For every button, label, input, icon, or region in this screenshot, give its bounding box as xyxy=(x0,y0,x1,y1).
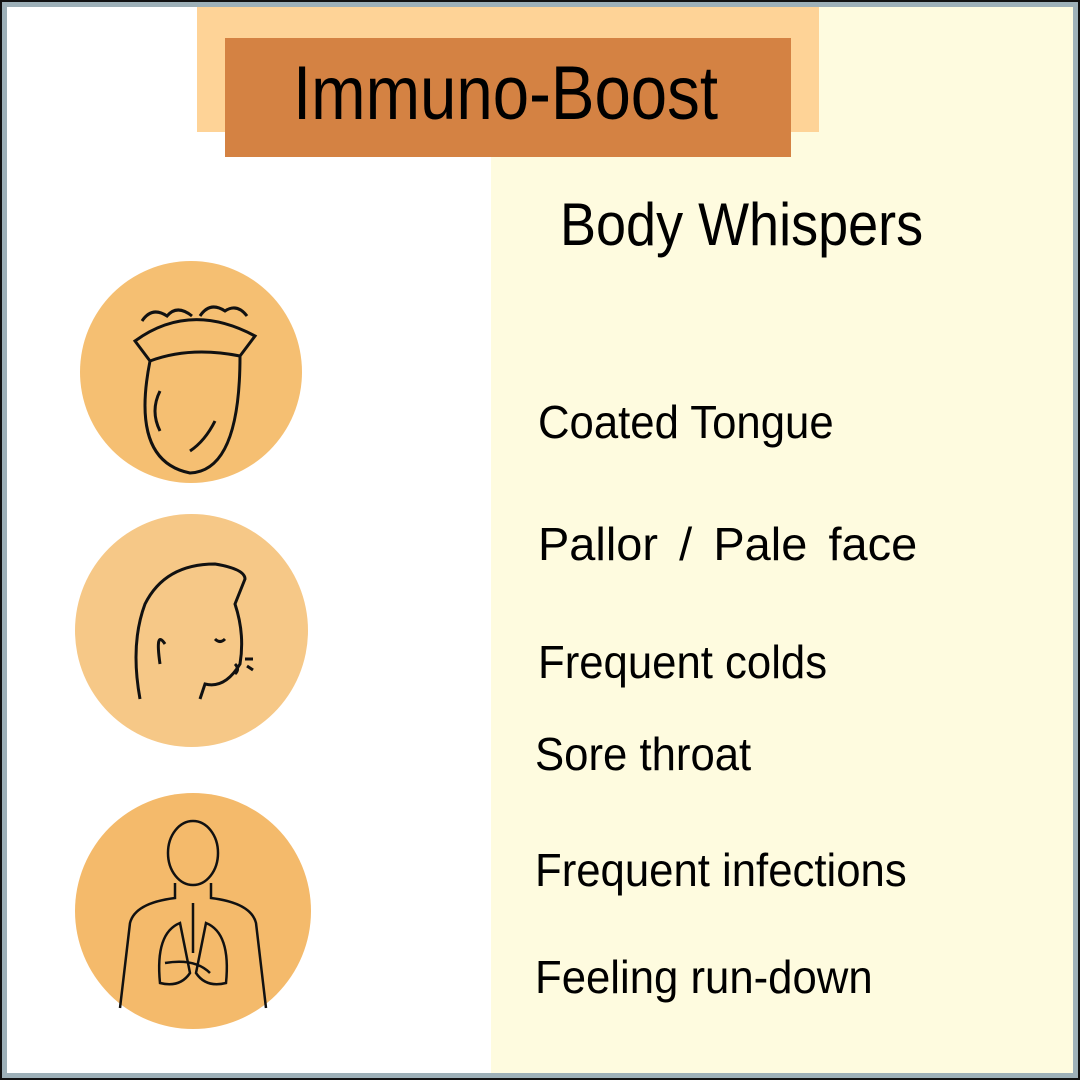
panel: cream right side xyxy=(491,7,1073,1073)
icon: tongue xyxy=(80,261,302,483)
title xyxy=(225,38,791,157)
item: Frequent infections: Frequent infections xyxy=(535,844,907,896)
icon: face coughing xyxy=(75,514,308,747)
item: Feeling run-down: Feeling run-down xyxy=(535,951,873,1003)
icon: person with lungs xyxy=(75,793,311,1029)
title backing block xyxy=(197,7,819,132)
item: Frequent colds: Frequent colds xyxy=(538,636,827,688)
item: Pallor: Pallor / Pale face xyxy=(538,518,917,570)
item: Sore throat: Sore throat xyxy=(535,728,751,780)
item: Coated Tongue: Coated Tongue xyxy=(538,396,834,448)
heading: Body Whispers: Body Whispers xyxy=(560,191,923,258)
title: Immuno-Boost xyxy=(293,51,718,136)
